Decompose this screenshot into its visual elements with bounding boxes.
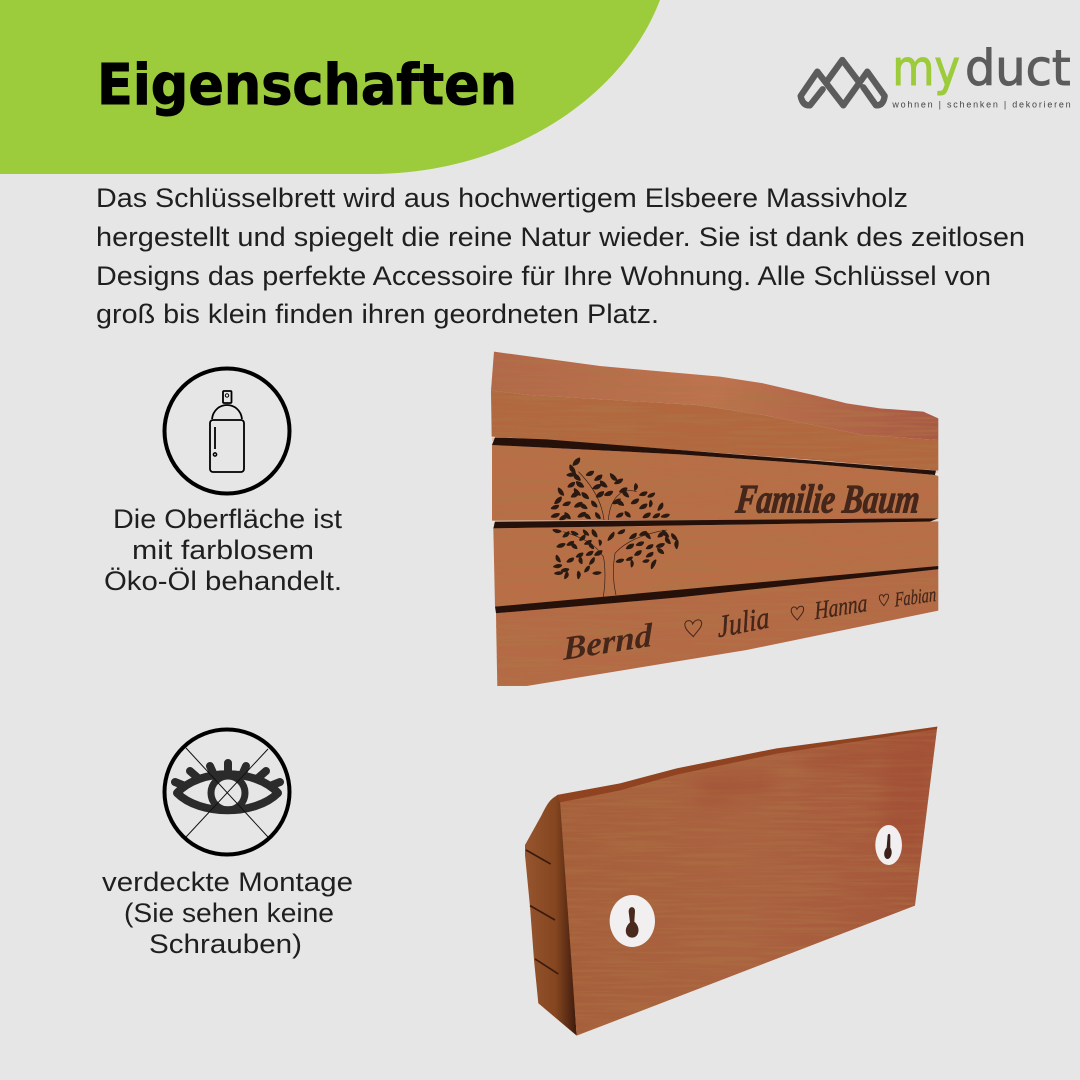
logo wordmark duct: duct (965, 41, 1071, 97)
plank 3 (493, 522, 938, 607)
icon: crossed-out eye (164, 730, 290, 854)
text: hidden mounting: Schrauben) (149, 929, 302, 959)
engraved tree (552, 458, 678, 597)
engraved name: Familie Baum: Familie Baum (733, 477, 922, 522)
intro text: Das Schlüsselbrett wird aus hochwertigem Elsbeere Massivholz (96, 183, 908, 213)
text: surface treatment: mit farblosem (132, 535, 314, 565)
title: Eigenschaften (97, 53, 517, 118)
plank 4 (496, 569, 938, 686)
intro text: hergestellt und spiegelt die reine Natur wieder. Sie ist dank des zeitlosen (96, 222, 1025, 252)
photo: key board back (525, 726, 938, 1036)
intro text: groß bis klein finden ihren geordneten Platz. (96, 299, 659, 329)
tree trunk and branches (563, 472, 667, 597)
text: surface treatment (104, 504, 343, 596)
wood grain (560, 734, 936, 1036)
mounting hole right (875, 825, 902, 865)
text: hidden mounting (102, 867, 353, 959)
icon: spray can (164, 368, 290, 494)
tree foliage (552, 458, 678, 578)
text: surface treatment: Die Oberfläche ist (113, 504, 343, 534)
live edge (557, 727, 937, 802)
wood grain (491, 356, 938, 686)
plank 1 front (491, 391, 938, 471)
board side (525, 795, 577, 1036)
gaps between planks (492, 437, 938, 613)
logo tagline: wohnen | schenken | dekorieren (891, 100, 1071, 110)
plank 2 (492, 445, 938, 521)
intro text (96, 183, 1025, 329)
photo: key board front (491, 352, 938, 686)
text: hidden mounting: verdeckte Montage (102, 867, 353, 897)
engraved name: Fabian: Fabian (894, 584, 936, 612)
text: surface treatment: Öko-Öl behandelt. (104, 566, 342, 596)
plank 1 top face (491, 352, 938, 440)
engraved name: Hanna: Hanna (813, 589, 868, 625)
logo mark: mountains (801, 60, 885, 105)
logo wordmark my: my (892, 41, 960, 97)
engraved name: Julia: Julia (716, 600, 771, 644)
text: hidden mounting: (Sie sehen keine (124, 898, 334, 928)
side slots (526, 850, 558, 974)
green header shape (0, 0, 660, 174)
reddish stains (702, 740, 935, 846)
logo: myduct (801, 41, 1071, 110)
mounting hole left (610, 895, 655, 947)
engraved name: Bernd: Bernd (562, 617, 654, 668)
engraved hearts (685, 594, 889, 637)
back face (560, 727, 937, 1036)
intro text: Designs das perfekte Accessoire für Ihre Wohnung. Alle Schlüssel von (96, 261, 991, 291)
